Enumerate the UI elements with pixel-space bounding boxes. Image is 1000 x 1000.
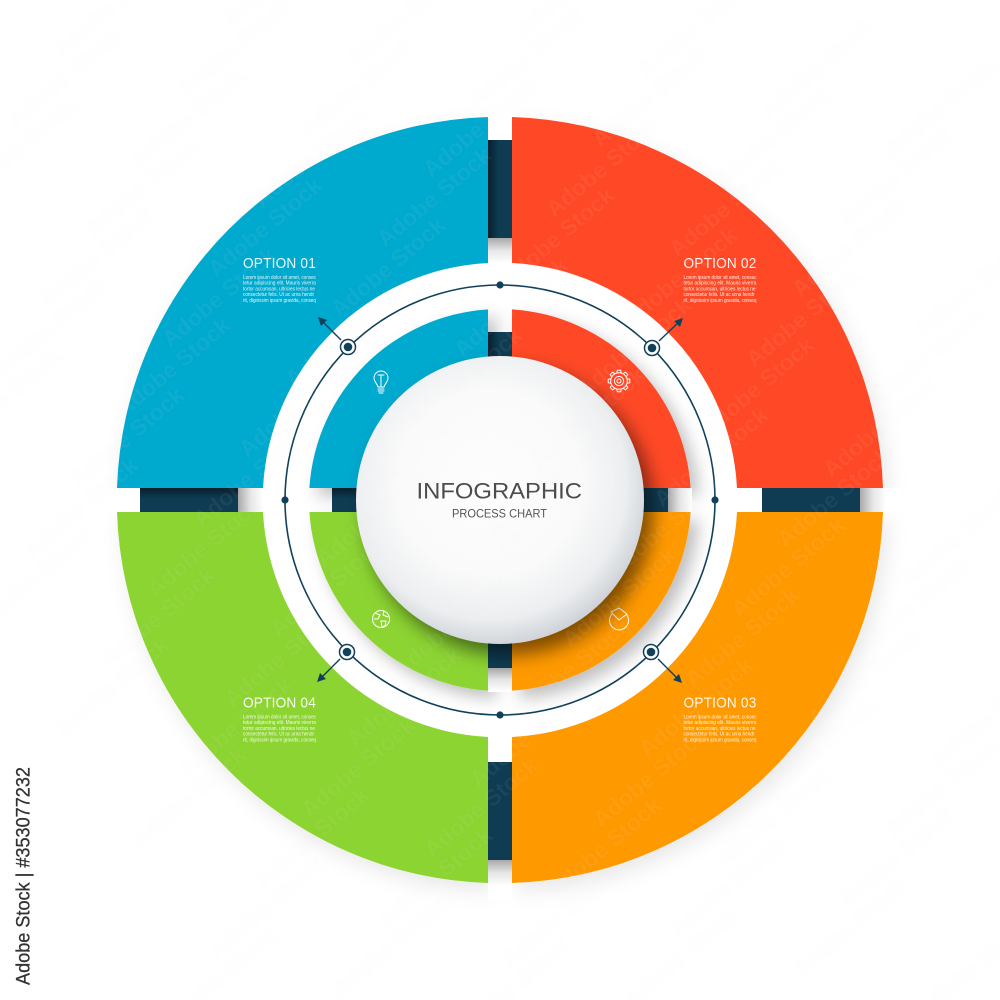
watermark pattern: Adobe Stock — [157, 242, 281, 352]
thin ring — [285, 285, 715, 715]
watermark pattern: Adobe Stock — [388, 572, 512, 682]
inner segment blue — [309, 309, 488, 488]
text block: option 04 — [243, 696, 317, 743]
text block: option 02: rit, dignissim ipsum gravida, conseq — [684, 298, 756, 304]
icon: pie chart — [610, 608, 629, 630]
watermark pattern: Adobe Stock — [34, 202, 158, 312]
text block: option 01 — [243, 256, 317, 304]
text block: option 02: consectetur felis. Ut ac urna hendr — [684, 292, 755, 298]
watermark pattern: Adobe Stock — [204, 852, 328, 962]
watermark pattern: Adobe Stock — [250, 782, 374, 892]
watermark pattern: Adobe Stock — [357, 392, 481, 502]
watermark pattern: Adobe Stock — [50, 632, 174, 742]
watermark pattern: Adobe Stock — [787, 192, 911, 302]
watermark pattern: Adobe Stock — [19, 452, 143, 562]
watermark pattern: Adobe Stock — [65, 382, 189, 492]
arrows and nodes — [317, 317, 683, 683]
watermark pattern: Adobe Stock — [295, 32, 419, 142]
watermark pattern: Adobe Stock — [588, 722, 712, 832]
watermark pattern: Adobe Stock — [372, 142, 496, 252]
watermark pattern: Adobe Stock — [711, 762, 835, 872]
text block: option 03: tetur adipiscing elit. Mauris viverra — [684, 720, 757, 726]
icon: gear — [608, 370, 630, 392]
segment: option 04 green — [117, 512, 488, 883]
watermark pattern: Adobe Stock — [542, 792, 666, 902]
watermark pattern: Adobe Stock — [726, 512, 850, 622]
watermark pattern: Adobe Stock — [311, 462, 435, 572]
watermark pattern: Adobe Stock — [587, 42, 711, 152]
watermark pattern: Adobe Stock — [465, 682, 589, 792]
watermark pattern: Adobe Stock — [834, 802, 958, 912]
text block: option 02: OPTION 02 — [684, 256, 756, 272]
watermark pattern: Adobe Stock — [126, 62, 250, 172]
text block: option 01: OPTION 01 — [243, 256, 316, 272]
text block: option 02: tetur adipiscing elit. Mauris viverra — [684, 281, 757, 287]
watermark pattern: Adobe Stock — [665, 832, 789, 942]
watermark pattern: Adobe Stock — [434, 502, 558, 612]
subtitle: PROCESS CHART — [452, 506, 548, 520]
watermark pattern: Adobe Stock — [342, 642, 466, 752]
watermark pattern: Adobe Stock — [772, 442, 896, 552]
watermark pattern: Adobe Stock — [326, 212, 450, 322]
watermark pattern: Adobe Stock — [803, 622, 927, 732]
text block: option 02: tortor accumsan, ultricies lectus ne — [684, 286, 756, 292]
text block: option 03: consectetur felis. Ut ac urna hendr — [684, 732, 755, 738]
watermark pattern: Adobe Stock — [664, 152, 788, 262]
white inner disc and gaps — [100, 100, 900, 900]
watermark pattern: Adobe Stock — [603, 472, 727, 582]
watermark pattern: Adobe Stock — [879, 52, 1000, 162]
watermark pattern: Adobe Stock — [710, 82, 834, 192]
watermark pattern: Adobe Stock — [849, 552, 973, 662]
text block: option 04: consectetur felis. Ut ac urna hendr — [243, 732, 314, 738]
watermark pattern: Adobe Stock — [818, 372, 942, 482]
text block: option 01: tetur adipiscing elit. Mauris viverra — [243, 281, 317, 287]
text block: option 01: rit, dignissim ipsum gravida, conseq — [243, 298, 316, 304]
watermark pattern: Adobe Stock — [634, 652, 758, 762]
center disc — [356, 356, 644, 644]
watermark pattern: Adobe Stock — [788, 872, 912, 982]
inner segments — [309, 309, 691, 691]
watermark pattern: Adobe Stock — [96, 562, 220, 672]
text block: option 02: Lorem ipsum dolor sit amet, consec — [684, 275, 757, 281]
watermark pattern: Adobe Stock — [173, 672, 297, 782]
watermark pattern: Adobe Stock — [756, 12, 880, 122]
watermark pattern: Adobe Stock — [541, 112, 665, 222]
watermark pattern: Adobe Stock — [127, 742, 251, 852]
watermark pattern: Adobe Stock — [327, 892, 451, 1000]
watermark pattern: Adobe Stock — [419, 752, 543, 862]
icon: globe — [372, 610, 390, 628]
watermark pattern: Adobe Stock — [203, 172, 327, 282]
watermark pattern: Adobe Stock — [741, 262, 865, 372]
watermark pattern: Adobe Stock — [757, 692, 881, 802]
watermark pattern: Adobe Stock — [572, 292, 696, 402]
text block: option 04: OPTION 04 — [243, 696, 316, 712]
watermark pattern: Adobe Stock — [142, 492, 266, 602]
inner segment orange — [512, 512, 691, 691]
text block: option 01: Lorem ipsum dolor sit amet, consec — [243, 275, 316, 281]
watermark pattern: Adobe Stock — [695, 332, 819, 442]
text block: option 02 — [684, 256, 757, 304]
watermark pattern: Adobe Stock — [265, 532, 389, 642]
watermark pattern: Adobe Stock — [418, 72, 542, 182]
watermark pattern: Adobe Stock — [449, 252, 573, 362]
text block: option 04: tetur adipiscing elit. Mauris viverra — [243, 720, 317, 726]
inner segment green — [309, 512, 488, 691]
text block: option 03: Lorem ipsum dolor sit amet, consec — [684, 714, 757, 720]
segment: option 02 red — [512, 117, 883, 488]
text block: option 04: rit, dignissim ipsum gravida, conseq — [243, 737, 316, 743]
text block: option 03 — [684, 696, 757, 743]
watermark pattern: Adobe Stock — [111, 312, 235, 422]
outer dark connectors — [140, 140, 860, 860]
watermark pattern: Adobe Stock — [188, 422, 312, 532]
watermark pattern: Adobe Stock — [296, 712, 420, 822]
node and arrow: option 01 — [318, 317, 356, 354]
watermark pattern: Adobe Stock — [680, 582, 804, 692]
text block: option 01: tortor accumsan, ultricies lectus ne — [243, 286, 315, 292]
icon: light bulb — [374, 371, 388, 393]
ring dots — [281, 281, 719, 719]
text block: option 03: tortor accumsan, ultricies lectus ne — [684, 726, 756, 732]
inner connector shadows — [488, 488, 692, 692]
watermark pattern: Adobe Stock — [496, 862, 620, 972]
outer segments — [117, 117, 883, 883]
watermark pattern: Adobe Stock — [249, 102, 373, 212]
watermark pattern: Adobe Stock — [464, 2, 588, 112]
watermark pattern: Adobe Stock — [495, 182, 619, 292]
watermark pattern: Adobe Stock — [373, 822, 497, 932]
text block: option 03: rit, dignissim ipsum gravida, conseq — [684, 737, 756, 743]
watermark pattern: Adobe Stock — [833, 122, 957, 232]
watermark pattern: Adobe Stock — [3, 22, 127, 132]
watermark pattern: Adobe Stock — [618, 222, 742, 332]
node and arrow: option 03 — [644, 644, 682, 683]
inner dark connectors — [332, 332, 668, 668]
watermark pattern: Adobe Stock — [234, 352, 358, 462]
watermark pattern: Adobe Stock — [403, 322, 527, 432]
title: INFOGRAPHIC — [416, 478, 582, 504]
text block: option 04: Lorem ipsum dolor sit amet, consec — [243, 714, 316, 720]
text block: option 03: OPTION 03 — [684, 696, 756, 712]
stock id caption: Adobe Stock | #353077232 — [14, 767, 34, 985]
watermark pattern: Adobe Stock — [480, 432, 604, 542]
watermark pattern: Adobe Stock — [864, 302, 988, 412]
text block: option 01: consectetur felis. Ut ac urna hendr — [243, 292, 314, 298]
watermark pattern: Adobe Stock — [280, 282, 404, 392]
node and arrow: option 02 — [644, 318, 683, 356]
watermark pattern: Adobe Stock — [557, 542, 681, 652]
watermark pattern: Adobe Stock — [526, 362, 650, 472]
segment: option 03 orange — [512, 512, 883, 883]
watermark pattern: Adobe Stock — [219, 602, 343, 712]
text block: option 04: tortor accumsan, ultricies lectus ne — [243, 726, 315, 732]
segment: option 01 blue — [117, 117, 488, 488]
connector shadows — [238, 238, 886, 886]
node and arrow: option 04 — [317, 644, 354, 682]
watermark pattern: Adobe Stock — [80, 132, 204, 242]
inner segment red — [512, 309, 691, 488]
watermark pattern: Adobe Stock — [649, 402, 773, 512]
watermark pattern: Adobe Stock — [511, 612, 635, 722]
